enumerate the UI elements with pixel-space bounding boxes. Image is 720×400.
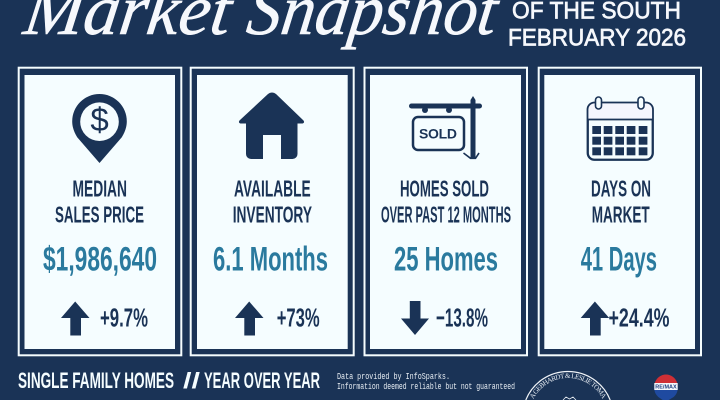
panel: median sales price bbox=[19, 68, 181, 355]
icon: dollar location pin bbox=[72, 94, 127, 163]
label: days on market: DAYS ON bbox=[591, 176, 651, 202]
arrow: down bbox=[401, 301, 429, 335]
value: available inventory: 6.1 Months bbox=[213, 240, 328, 278]
icon: sold sign bbox=[409, 96, 482, 158]
icon: calendar bbox=[588, 97, 653, 160]
value: days on market: 41 Days bbox=[581, 240, 657, 278]
data disclaimer bbox=[337, 372, 515, 392]
label: days on market: MARKET bbox=[592, 202, 650, 228]
footer label: SINGLE FAMILY HOMES bbox=[18, 368, 174, 393]
RE/MAX balloon logo: RE/MAX bbox=[655, 384, 677, 390]
change: homes sold: −13.8% bbox=[436, 302, 488, 332]
arrow: up bbox=[581, 302, 609, 336]
icon: dollar location pin: $ bbox=[90, 101, 109, 138]
value: homes sold: 25 Homes bbox=[394, 240, 498, 278]
label: homes sold: HOMES SOLD bbox=[400, 176, 489, 202]
data disclaimer: Data provided by InfoSparks. bbox=[337, 372, 450, 382]
label: median sales price: MEDIAN bbox=[72, 176, 127, 202]
label: days on market bbox=[591, 176, 651, 228]
title bbox=[19, 0, 505, 50]
label: available inventory: AVAILABLE bbox=[234, 176, 311, 202]
subtitle: FEBRUARY 2026 bbox=[508, 24, 686, 52]
RE/MAX balloon logo bbox=[654, 374, 678, 400]
subtitle bbox=[508, 0, 686, 52]
data disclaimer: Information deemed reliable but not guaranteed bbox=[337, 382, 515, 392]
panel: homes sold bbox=[364, 68, 527, 355]
label: median sales price bbox=[55, 176, 144, 228]
change: median sales price: +9.7% bbox=[100, 302, 148, 332]
panel: days on market bbox=[539, 68, 701, 355]
change: available inventory: +73% bbox=[277, 302, 320, 332]
arrow: up bbox=[235, 302, 264, 336]
value: median sales price: $1,986,640 bbox=[43, 240, 157, 278]
arrow: up bbox=[61, 302, 90, 336]
label: homes sold bbox=[381, 176, 511, 228]
change: days on market: +24.4% bbox=[608, 302, 670, 332]
panel: available inventory bbox=[191, 68, 354, 355]
label: available inventory: INVENTORY bbox=[233, 202, 312, 228]
team seal logo: A GEBHARDT & LESLIE TOMA bbox=[530, 373, 606, 400]
icon: sold sign: SOLD bbox=[419, 126, 457, 142]
label: median sales price: SALES PRICE bbox=[55, 202, 144, 228]
panel: homes sold: OVER PAST 12 MONTHS bbox=[381, 202, 511, 228]
footer label: // bbox=[183, 368, 200, 393]
footer label: YEAR OVER YEAR bbox=[204, 368, 320, 393]
label: available inventory bbox=[233, 176, 312, 228]
icon: house bbox=[239, 92, 304, 159]
